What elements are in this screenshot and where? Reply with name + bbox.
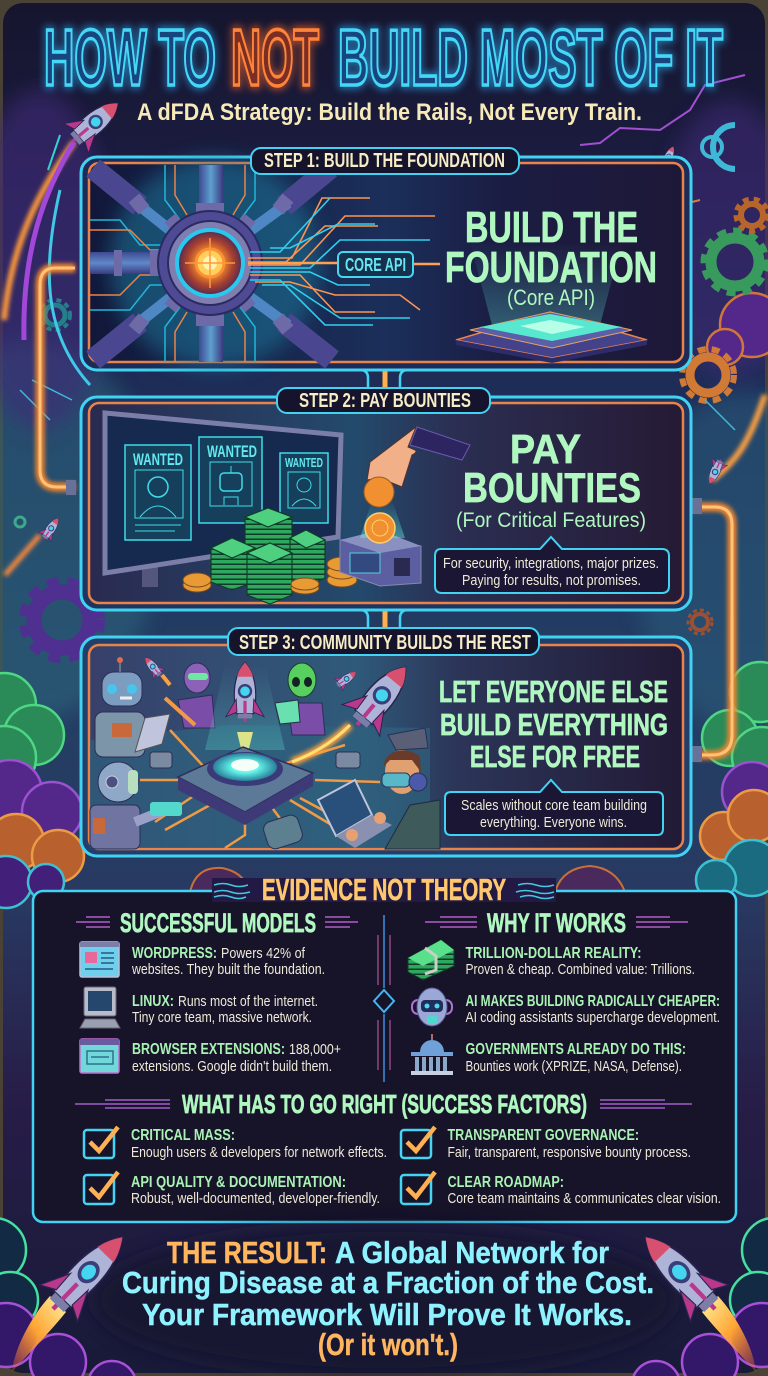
text: clear roadmap	[448, 1174, 721, 1207]
result backing	[94, 1225, 674, 1375]
heading: pay bounties	[463, 426, 641, 511]
illustration: central rocket	[205, 662, 285, 765]
illustration: cables	[140, 730, 380, 848]
text: governments already do this: Bounties work (XPRIZE, NASA, Defense).	[466, 1058, 682, 1075]
result text	[122, 1235, 654, 1362]
text: trillion-dollar reality: Proven & cheap. Combined value: Trillions.	[466, 961, 695, 978]
wanted poster 2: WANTED	[207, 442, 257, 461]
panel: evidence	[33, 872, 736, 1222]
illustration: person at laptop	[318, 750, 440, 849]
icon: cash	[408, 940, 454, 980]
wanted poster 3	[280, 453, 328, 523]
result text: (Or it won't.)	[318, 1327, 458, 1362]
callout: security	[435, 537, 669, 593]
heading: pay bounties: PAY	[510, 426, 581, 472]
title: HOW TO	[44, 13, 216, 102]
text: transparent governance	[448, 1127, 691, 1161]
wanted poster 2	[199, 437, 262, 523]
illustration: collection box	[340, 500, 421, 586]
title: HOW TO	[44, 13, 216, 102]
subtitle: A dFDA Strategy: Build the Rails, Not Every Train.	[137, 99, 642, 126]
icon: rocket bottom right	[627, 1219, 756, 1372]
illustration: small rocket	[139, 653, 170, 685]
wanted poster 1	[125, 445, 191, 540]
heading: build the foundation: FOUNDATION	[445, 243, 657, 292]
result text: Your Framework Will Prove It Works.	[142, 1297, 632, 1332]
text: ai makes building cheaper	[466, 993, 720, 1026]
text: api quality	[131, 1174, 380, 1207]
decorative clouds right	[555, 293, 768, 900]
step 2 pill: STEP 2: PAY BOUNTIES	[299, 390, 471, 412]
illustration: purple alien with tablet	[165, 663, 215, 728]
wanted poster 1: WANTED	[133, 450, 183, 469]
illustration: small parts	[150, 728, 428, 768]
illustration: wanted monitor	[105, 413, 341, 587]
decorative clouds bottom	[0, 1218, 768, 1376]
step 1 pill	[251, 148, 519, 174]
panel: step 1	[81, 148, 691, 370]
checkbox: clear roadmap	[401, 1172, 435, 1204]
text: linux	[132, 993, 318, 1026]
callout: security: For security, integrations, major prizes.	[443, 555, 659, 572]
result text: THE RESULT:	[167, 1235, 327, 1270]
text: wordpress: websites. They built the foundation.	[131, 961, 325, 978]
heading: what has to go right: WHAT HAS TO GO RIGHT (SUCCESS FACTORS)	[182, 1089, 587, 1119]
text: browser extensions: 188,000+	[289, 1041, 341, 1058]
text: critical mass: Enough users & developers for network effects.	[131, 1144, 387, 1161]
connectors between panels	[300, 368, 470, 638]
illustration: circuit lines	[248, 198, 440, 325]
ornaments: success factors heading	[75, 1100, 692, 1108]
text: api quality: Robust, well-documented, developer-friendly.	[131, 1190, 380, 1207]
text: trillion-dollar reality: TRILLION-DOLLAR REALITY:	[466, 945, 642, 962]
ornaments: sub heading lines	[76, 915, 688, 1082]
text: transparent governance: TRANSPARENT GOVERNANCE:	[448, 1127, 639, 1144]
text: browser extensions: extensions. Google didn't build them.	[132, 1058, 332, 1075]
text: core api subtitle: (Core API)	[507, 285, 595, 310]
orange connector pipe left	[40, 268, 76, 495]
icon: robot	[412, 988, 452, 1026]
heading: let everyone else: BUILD EVERYTHING	[440, 707, 668, 742]
text: browser extensions: BROWSER EXTENSIONS:	[132, 1041, 285, 1058]
heading: pay bounties: BOUNTIES	[463, 464, 641, 511]
illustration: coins	[183, 557, 357, 594]
step 1 pill: STEP 1: BUILD THE FOUNDATION	[264, 150, 505, 172]
panel: step 2	[81, 388, 691, 610]
illustration: pipe hub	[90, 158, 332, 368]
step 2 pill	[277, 388, 490, 413]
illustration: robot with tablet	[90, 762, 182, 849]
text: critical mass	[131, 1127, 387, 1161]
decorative clouds left	[0, 673, 250, 908]
decorative gears	[15, 75, 768, 659]
rocket top left with trail	[4, 89, 130, 385]
text: governments already do this: GOVERNMENTS ALREADY DO THIS:	[466, 1041, 686, 1058]
text: transparent governance: Fair, transparent, responsive bounty process.	[448, 1144, 691, 1161]
text: critical mass: CRITICAL MASS:	[131, 1127, 235, 1144]
illustration: small ship	[332, 666, 360, 692]
illustration: can	[262, 813, 304, 851]
text: for critical features: (For Critical Features)	[456, 509, 646, 532]
illustration: hand with coins	[364, 427, 470, 543]
text: clear roadmap: CLEAR ROADMAP:	[448, 1174, 564, 1191]
text: wordpress	[131, 945, 325, 978]
checkbox: critical mass	[84, 1127, 118, 1158]
icon: computer	[80, 987, 120, 1028]
wanted poster 3: WANTED	[285, 455, 323, 470]
callout: scales: everything. Everyone wins.	[480, 814, 627, 831]
text: wordpress: Powers 42% of	[221, 945, 306, 962]
heading: let everyone else: LET EVERYONE ELSE	[439, 674, 668, 709]
callout: scales	[445, 780, 663, 835]
text: linux: Tiny core team, massive network.	[132, 1009, 312, 1026]
ornaments: evidence title	[214, 884, 554, 898]
heading: let everyone else: ELSE FOR FREE	[470, 739, 640, 774]
icon: rocket bottom left	[12, 1219, 141, 1372]
text: linux: Runs most of the internet.	[178, 993, 318, 1010]
text: browser extensions	[132, 1041, 341, 1075]
checkbox: api quality	[84, 1172, 118, 1204]
panel: step 3	[81, 628, 691, 856]
heading: let everyone else	[439, 674, 668, 774]
result text: A Global Network for	[335, 1235, 609, 1270]
illustration: community floor	[90, 725, 430, 848]
illustration: cash stacks	[211, 508, 325, 604]
orange connector pipe right	[692, 498, 732, 762]
heading: evidence not theory: EVIDENCE NOT THEORY	[262, 872, 506, 907]
illustration: large rocket	[292, 651, 424, 762]
evidence title backing	[212, 878, 556, 902]
heading: why it works: WHY IT WORKS	[487, 908, 626, 938]
label: core api	[338, 252, 413, 277]
label: core api: CORE API	[345, 255, 406, 275]
illustration: alien with tablet	[275, 663, 325, 735]
result text: Curing Disease at a Fraction of the Cost.	[122, 1265, 654, 1300]
step 3 pill: STEP 3: COMMUNITY BUILDS THE REST	[239, 632, 531, 654]
callout: scales: Scales without core team building	[461, 797, 647, 814]
text: linux: LINUX:	[132, 993, 174, 1010]
heading: successful models: SUCCESSFUL MODELS	[120, 908, 316, 938]
icon: wordpress	[80, 942, 119, 977]
title	[44, 13, 723, 102]
illustration: central platform	[178, 747, 313, 825]
checkbox: transparent governance	[401, 1127, 435, 1158]
text: api quality: API QUALITY & DOCUMENTATION:	[131, 1174, 346, 1191]
icon: browser	[80, 1039, 119, 1073]
illustration: robot with laptop	[95, 657, 170, 757]
text: wordpress: WORDPRESS:	[132, 945, 217, 962]
text: governments already do this	[466, 1041, 686, 1075]
title: NOT	[231, 13, 319, 102]
small rocket right top	[650, 144, 680, 195]
text: trillion-dollar reality	[466, 945, 695, 978]
step 3 pill	[228, 628, 539, 655]
heading: build the foundation: BUILD THE	[465, 203, 638, 252]
icon: government	[411, 1034, 453, 1075]
small rocket upper right falling	[702, 395, 765, 487]
title: NOT	[231, 13, 319, 102]
small rocket left middle	[5, 514, 65, 575]
illustration: glowing platform	[456, 242, 647, 363]
callout: security: Paying for results, not promises.	[462, 572, 641, 589]
heading: build the foundation	[445, 203, 657, 292]
